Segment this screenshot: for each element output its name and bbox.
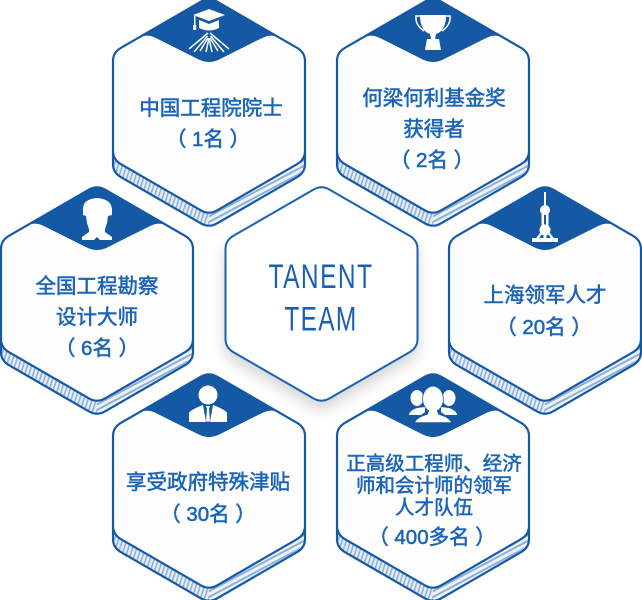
panel: state council special allowance — [113, 374, 305, 600]
label text: （ 20名 ） — [496, 316, 592, 339]
label text: 享受政府特殊津贴 — [126, 471, 290, 494]
panel: Shanghai leading talents — [449, 187, 641, 414]
label text: （ 6名 ） — [55, 337, 139, 360]
label text: 设计大师 — [56, 306, 138, 329]
icon: trophy — [416, 15, 450, 50]
panel: Ho Leung Ho Lee prize — [337, 0, 529, 226]
label text — [36, 275, 158, 360]
icon: Oriental Pearl tower — [532, 192, 558, 242]
label text: （ 30名 ） — [160, 503, 256, 526]
icon: graduation cap — [189, 9, 229, 52]
label text: 全国工程勘察 — [36, 275, 158, 298]
icon: businessman — [189, 386, 227, 422]
label text — [362, 87, 506, 172]
centre title — [268, 258, 374, 339]
panel: national survey and design masters — [1, 187, 193, 414]
label text — [139, 97, 283, 151]
centre title: TEAM — [284, 301, 358, 339]
label text: （ 400多名 ） — [368, 526, 496, 549]
label text: 中国工程院院士 — [139, 97, 283, 120]
icon: group of people — [409, 386, 457, 423]
label text — [484, 284, 606, 339]
centre hexagon: TANENT TEAM — [226, 187, 418, 401]
label text: 何梁何利基金奖 — [362, 87, 506, 110]
label text: （ 2名 ） — [390, 149, 474, 172]
label text — [346, 453, 522, 549]
panel: academicians — [113, 0, 305, 226]
label text: 上海领军人才 — [484, 284, 606, 307]
label text: 师和会计师的领军 — [356, 475, 512, 497]
label text: 正高级工程师、经济 — [346, 453, 522, 475]
panel: senior engineers, economists and accountants — [337, 374, 529, 600]
label text: （ 1名 ） — [166, 128, 250, 151]
label text — [126, 471, 290, 526]
label text: 人才队伍 — [395, 497, 473, 519]
centre title: TANENT — [268, 258, 374, 296]
icon: worker silhouette — [82, 198, 112, 240]
label text: 获得者 — [403, 118, 465, 141]
